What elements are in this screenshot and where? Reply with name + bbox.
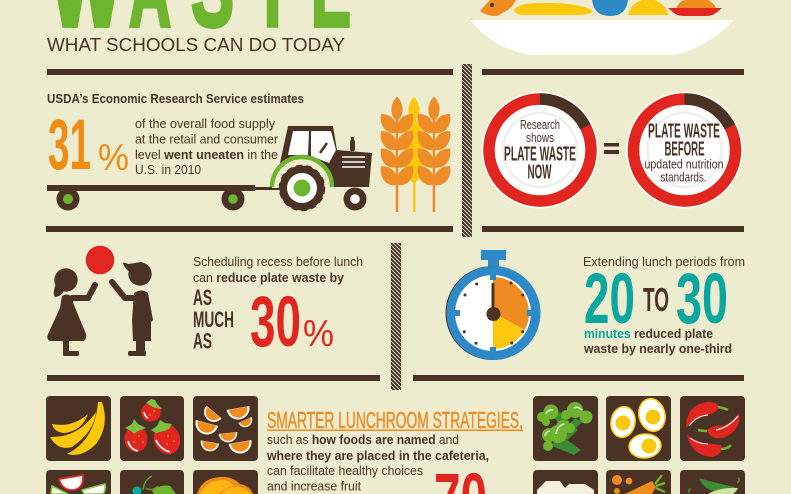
chart: plate waste now: shows [526, 131, 554, 145]
title [50, 0, 351, 50]
description text [135, 117, 278, 177]
statistic: 20 to 30: 20 [584, 260, 635, 339]
icon: bananas [46, 396, 111, 461]
as much as label: MUCH [193, 307, 234, 332]
description text: at the retail and consumer [135, 132, 278, 146]
icon: chili peppers [680, 396, 745, 461]
statistic: 31%: 31 [48, 106, 91, 185]
statistic: 20 to 30: TO [643, 281, 669, 318]
as much as label: AS [193, 285, 212, 310]
icon: milk cartons [533, 470, 598, 494]
chart: plate waste now: Research [520, 118, 560, 132]
body text: where they are placed in the cafeteria, [266, 449, 489, 463]
icon: blueberries [120, 470, 184, 494]
statistic: 30%: % [303, 313, 334, 354]
chart: plate waste before: PLATE WASTE [648, 121, 720, 143]
intro text: USDA’s Economic Research Service estimates [47, 92, 304, 106]
chart: plate waste now: PLATE WASTE [504, 144, 576, 166]
panel: recess before lunch [47, 246, 363, 362]
description text: Extending lunch periods from [583, 255, 745, 269]
subtitle: WHAT SCHOOLS CAN DO TODAY [47, 35, 345, 55]
icon: children with ball [47, 246, 153, 356]
icon grid: food tiles left [46, 396, 258, 494]
body text [266, 433, 489, 494]
statistic: 30%: 30 [250, 283, 301, 362]
description text: Scheduling recess before lunch [193, 255, 363, 269]
dividers [46, 64, 744, 390]
icon: eggs [606, 396, 671, 461]
statistic: 20 to 30: 30 [676, 260, 728, 339]
icon: equals sign [604, 143, 619, 154]
description text: of the overall food supply [135, 117, 276, 131]
result text: waste by nearly one-third [583, 342, 732, 356]
as much as label: AS [193, 328, 212, 354]
statistic: 31%: % [98, 137, 129, 178]
icon: tractor and trailer [47, 126, 372, 210]
result text: minutes reduced plate [584, 327, 713, 341]
description text: U.S. in 2010 [135, 163, 201, 177]
panel: 31 percent uneaten [47, 92, 450, 212]
result text [583, 327, 732, 356]
icon grid: food tiles right [533, 396, 745, 494]
chart: plate waste before: updated nutrition [644, 158, 724, 172]
body text: and increase fruit [267, 480, 362, 494]
panel: extended lunch periods [446, 250, 745, 360]
icon: wheat [381, 96, 450, 212]
chart: plate waste now: NOW [528, 162, 552, 184]
icon: carrots [606, 470, 671, 494]
body text: can facilitate healthy choices [267, 464, 423, 478]
chart: plate waste before: BEFORE [664, 139, 704, 161]
body text: such as how foods are named and [267, 433, 459, 447]
description text [193, 255, 363, 285]
panel: smarter lunchroom strategies [266, 407, 523, 494]
icon: peas [680, 470, 745, 494]
illustration: plate of food [470, 0, 734, 55]
icon: broccoli [533, 396, 598, 461]
chart: plate waste before: standards. [660, 171, 706, 185]
chart: plate waste before [626, 92, 743, 208]
description text: level went uneaten in the [135, 148, 278, 162]
icon: orange slices [193, 396, 258, 461]
icon: apples [46, 470, 111, 494]
description text: can reduce plate waste by [193, 271, 344, 285]
statistic: 20 to 30 [584, 260, 728, 339]
icon: stopwatch [446, 250, 540, 360]
heading: SMARTER LUNCHROOM STRATEGIES, [267, 407, 523, 433]
as much as label [193, 285, 234, 354]
icon: strawberries [120, 396, 185, 461]
panel: plate waste comparison [482, 92, 743, 208]
icon: oranges [193, 470, 258, 494]
chart: plate waste now [482, 92, 598, 208]
